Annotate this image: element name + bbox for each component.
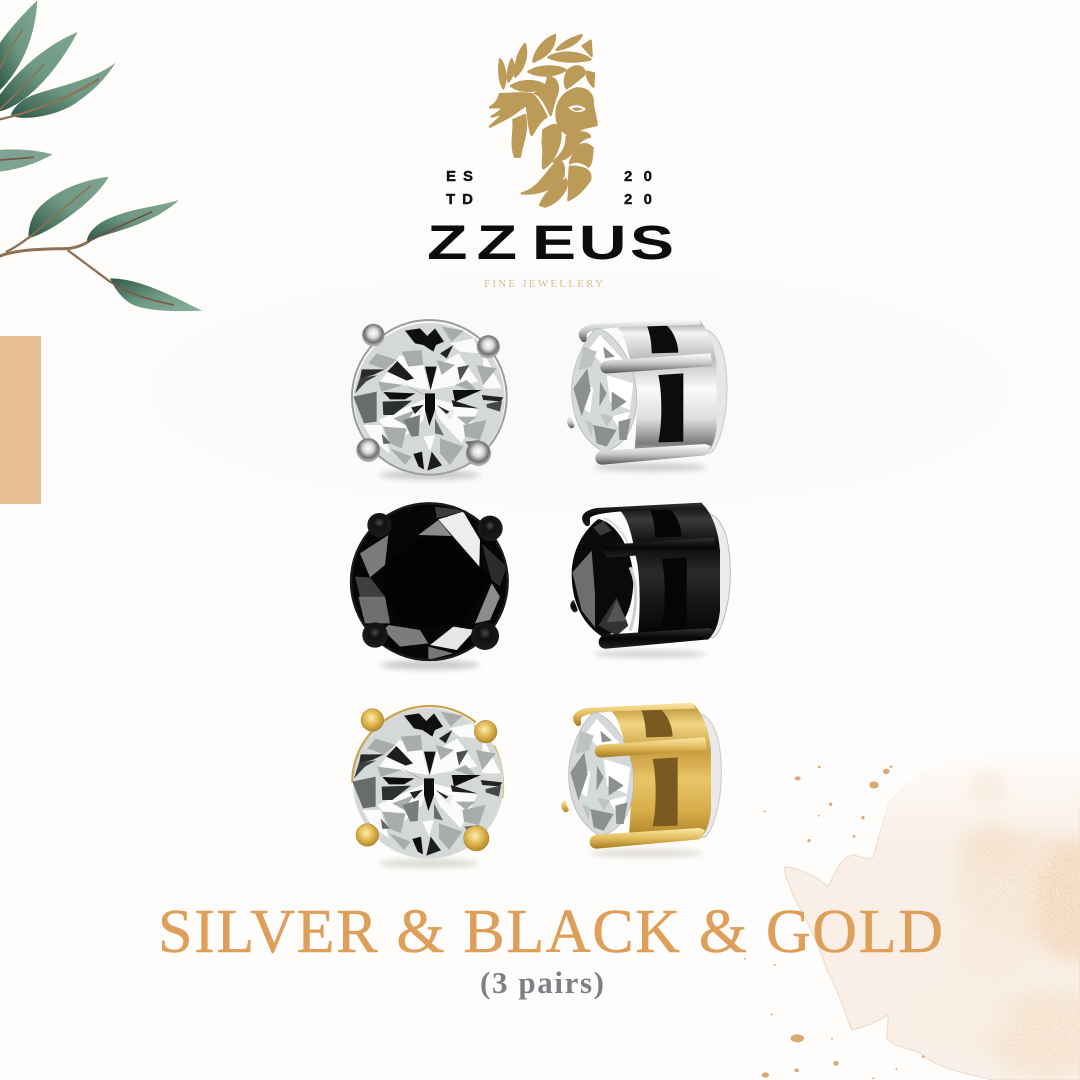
stems and veins	[0, 31, 173, 305]
logo text: ES TD	[446, 168, 473, 208]
earring: black side	[570, 503, 730, 658]
heading: SILVER & BLACK & GOLD	[158, 898, 943, 966]
background wash: pale grey	[140, 270, 1020, 510]
logo text: 20 20: 20	[624, 191, 652, 208]
logo: ZZEUS brand mark	[427, 35, 674, 290]
leaf 2	[0, 32, 78, 112]
leaf 5	[28, 177, 109, 238]
earring: silver front	[352, 320, 507, 480]
icon: Zeus head	[490, 35, 597, 207]
tagline: FINE JEWELLERY	[484, 278, 603, 290]
wordmark: ZZEUS	[427, 217, 674, 270]
logo text: ES TD: TD	[446, 191, 473, 208]
leaf 4	[0, 149, 53, 172]
leaf 6	[87, 200, 179, 242]
subheading: (3 pairs)	[480, 965, 604, 1000]
side accent block	[0, 336, 41, 504]
earring: silver side	[567, 319, 727, 471]
leaf 1	[0, 1, 37, 92]
leaf 3	[11, 63, 116, 118]
paint splatter dots	[744, 765, 925, 1079]
botanical branch: top left leaves	[0, 1, 202, 311]
leaf 7	[110, 278, 202, 311]
logo text: ES TD: ES	[446, 168, 473, 185]
logo text: 20 20	[624, 168, 652, 208]
watercolor stain: bottom right	[744, 736, 1080, 1080]
earring: gold front	[352, 706, 504, 868]
earring: black front	[350, 502, 509, 670]
logo text: 20 20: 20	[624, 168, 652, 185]
earring: gold side	[561, 703, 721, 857]
